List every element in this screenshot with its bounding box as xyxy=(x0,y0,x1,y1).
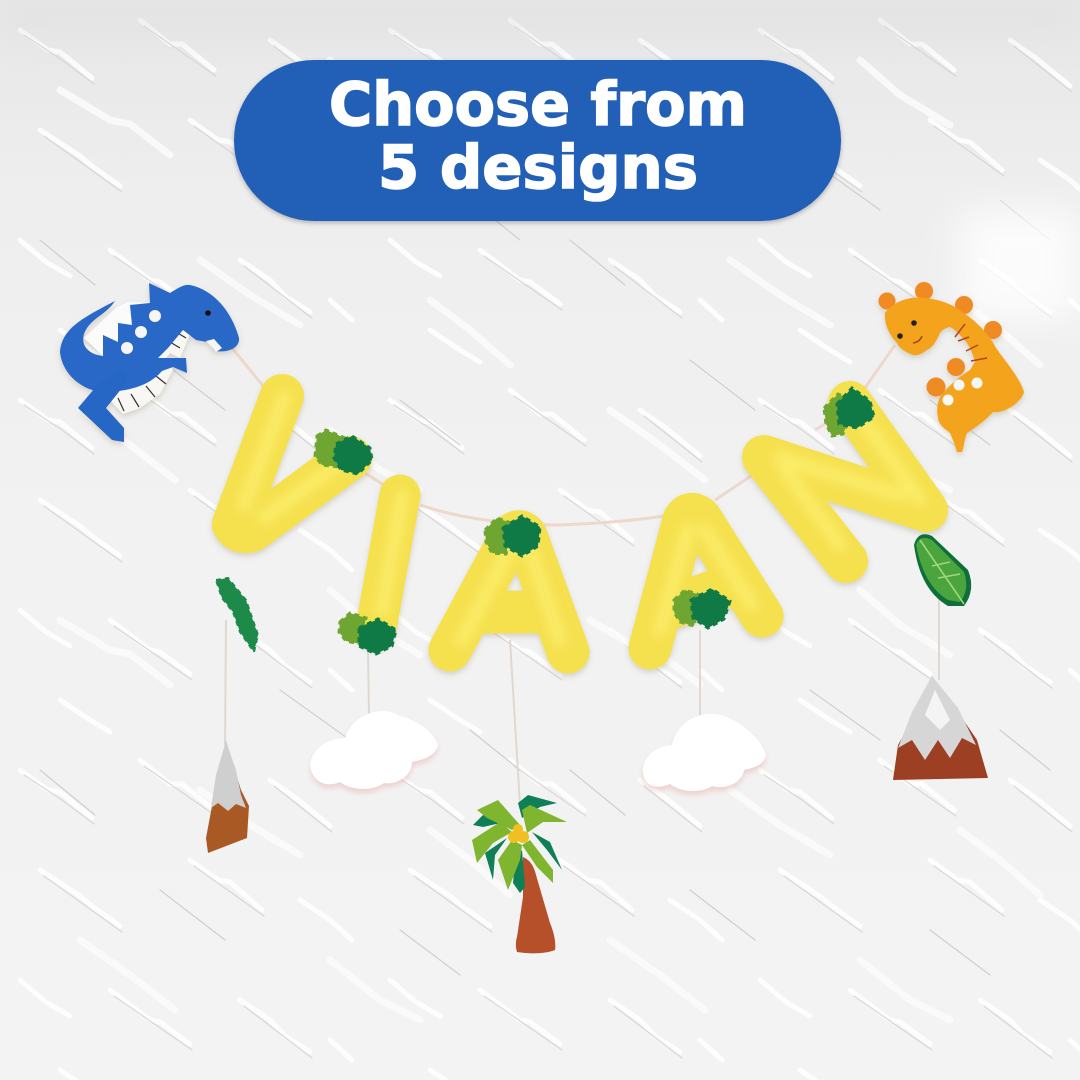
blue body xyxy=(60,283,239,392)
icon: palm tree xyxy=(472,795,567,953)
trunk xyxy=(516,857,555,953)
icon: blue t-rex xyxy=(60,283,239,442)
letter A second xyxy=(650,514,762,648)
letter V xyxy=(234,396,350,531)
coconuts xyxy=(513,824,523,834)
icon: small mountain left xyxy=(206,741,249,853)
icon: fern leaf left xyxy=(216,578,258,652)
letter I xyxy=(376,495,402,628)
icon: large mountain right xyxy=(893,676,988,780)
icon: monstera leaf right xyxy=(914,534,971,606)
white felt behind spine xyxy=(84,302,150,356)
leaf patch on I xyxy=(339,613,396,654)
leaf patch on first A xyxy=(485,516,540,556)
leaf patch on V xyxy=(315,430,372,474)
light fronds xyxy=(522,805,567,833)
garland string xyxy=(232,345,895,525)
dark fronds xyxy=(518,795,557,818)
leaf patch on N xyxy=(824,388,874,436)
icon: cloud left xyxy=(310,711,438,789)
icon: cloud right xyxy=(643,714,766,791)
white belly xyxy=(106,328,190,414)
leg xyxy=(78,370,127,442)
hanging threads xyxy=(225,570,939,805)
leaf patch on second A xyxy=(674,589,730,628)
icon: orange dinosaur xyxy=(878,282,1024,452)
heading text line 1: Choose from xyxy=(329,70,747,140)
leaf patches on letters xyxy=(315,388,874,654)
heading text line 2: 5 designs xyxy=(378,133,698,203)
letter A first xyxy=(450,532,568,652)
heading pill: Choose from 5 designs xyxy=(234,60,841,221)
letter N xyxy=(764,403,926,561)
